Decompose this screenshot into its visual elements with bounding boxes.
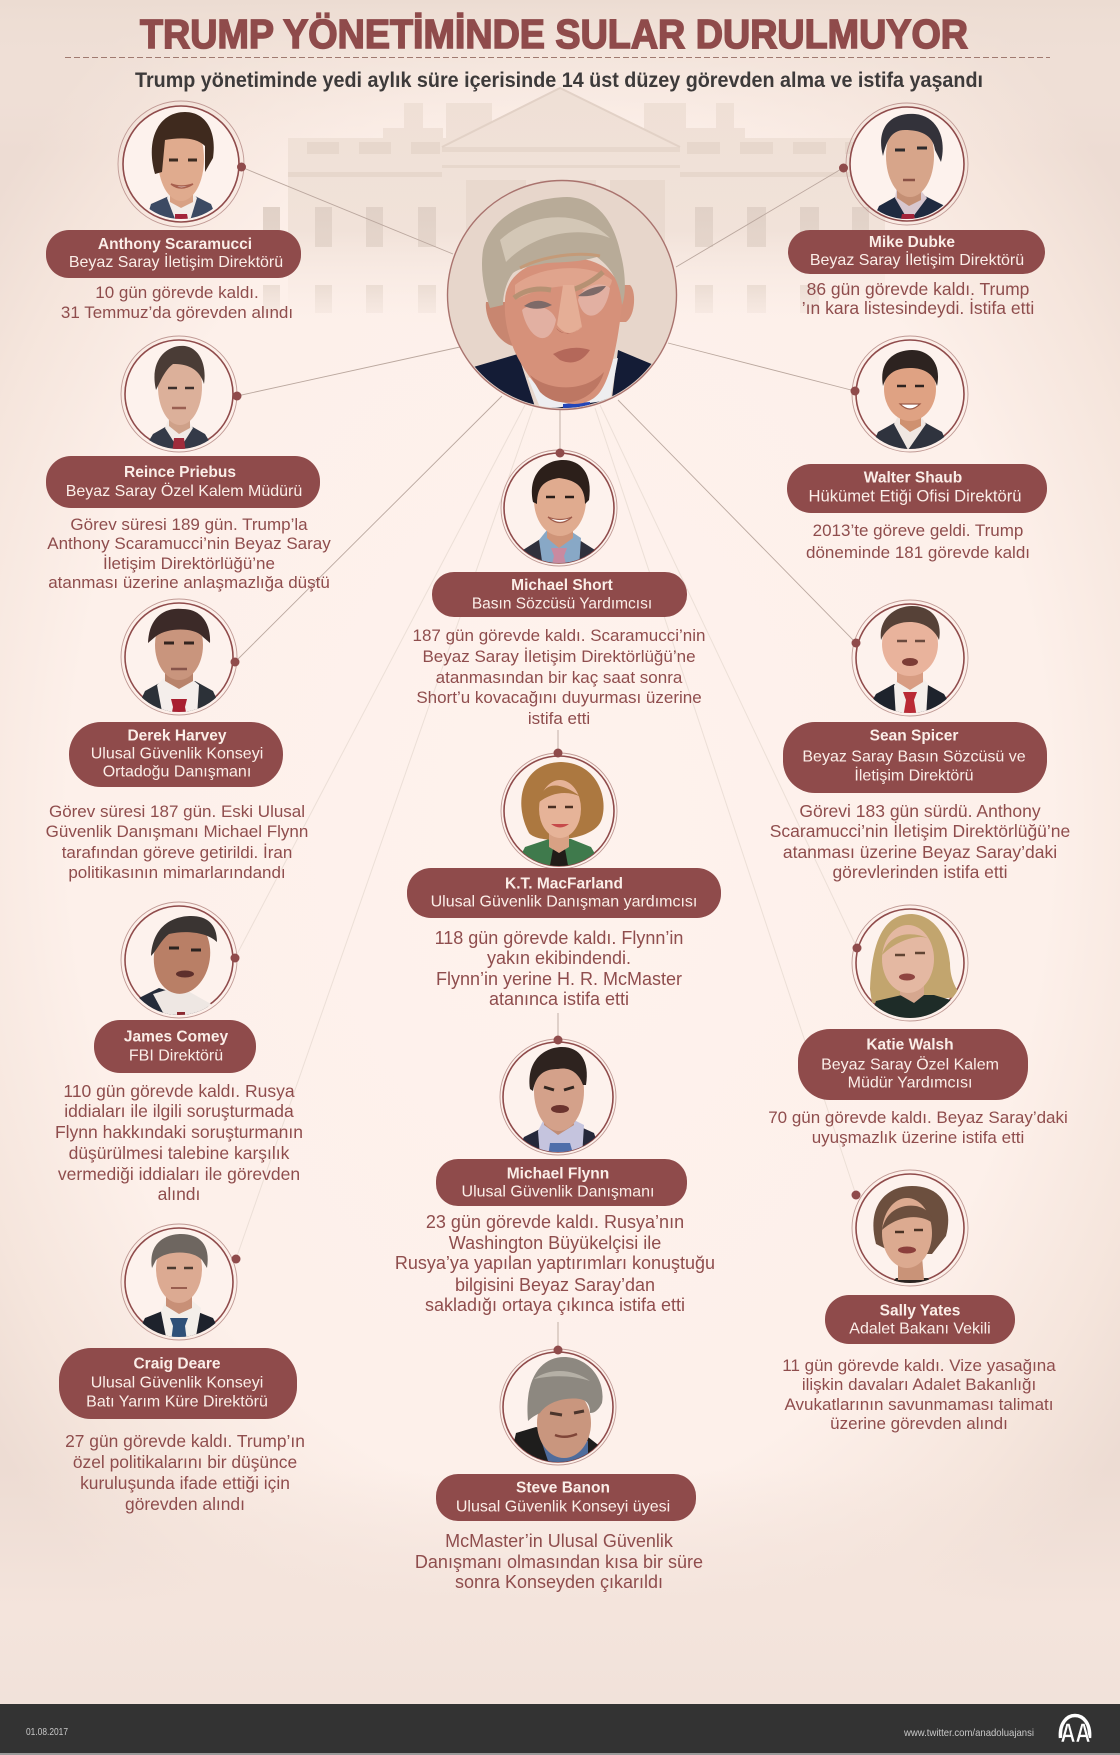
logo: AA: AA	[1060, 1718, 1090, 1748]
description: düşürülmesi talebine karşılık	[69, 1143, 290, 1163]
portrait	[118, 101, 246, 227]
description: döneminde 181 görevde kaldı	[806, 543, 1030, 562]
name pill: Reince Priebus	[124, 464, 236, 481]
person: Sally Yates	[782, 1170, 1056, 1433]
name pill: Michael Flynn	[507, 1166, 609, 1182]
description: iddiaları ile ilgili soruşturmada	[64, 1101, 294, 1121]
name pill: Katie Walsh	[866, 1036, 954, 1054]
name pill: FBI Direktörü	[129, 1048, 223, 1064]
description: 27 gün görevde kaldı. Trump’ın	[65, 1431, 305, 1451]
name pill: Müdür Yardımcısı	[848, 1074, 972, 1092]
name pill: Beyaz Saray İletişim Direktörü	[810, 250, 1024, 269]
portrait	[852, 1170, 968, 1288]
name pill: Beyaz Saray Özel Kalem Müdürü	[66, 482, 302, 500]
name pill: Walter Shaub	[864, 470, 962, 486]
name pill: Sally Yates	[880, 1302, 960, 1320]
name pill	[46, 456, 320, 508]
footer bar	[0, 1704, 1120, 1755]
portrait	[501, 448, 617, 568]
name pill: Batı Yarım Küre Direktörü	[86, 1394, 268, 1410]
name pill	[46, 230, 301, 278]
name pill	[59, 1348, 297, 1419]
person: James Comey	[55, 902, 303, 1204]
description: görevden alındı	[125, 1494, 245, 1514]
description: Flynn’in yerine H. R. McMaster	[436, 969, 682, 989]
portrait	[852, 600, 968, 718]
name pill: Anthony Scaramucci	[98, 236, 252, 253]
name pill: Basın Sözcüsü Yardımcısı	[472, 596, 652, 612]
description: 118 gün görevde kaldı. Flynn’in	[435, 928, 683, 948]
name pill: Ulusal Güvenlik Konseyi	[91, 1374, 263, 1392]
description: Görev süresi 189 gün. Trump’la	[70, 515, 308, 534]
connector lines	[235, 167, 857, 1350]
name pill: Beyaz Saray Basın Sözcüsü ve	[802, 748, 1026, 766]
portrait	[121, 902, 240, 1020]
description: Rusya’ya yapılan yaptırımları konuştuğu	[395, 1253, 715, 1273]
portrait	[500, 1036, 616, 1157]
description: alındı	[158, 1184, 200, 1204]
portrait	[839, 103, 968, 225]
description: Danışmanı olmasından kısa bir süre	[415, 1552, 703, 1572]
name pill	[783, 722, 1047, 793]
description: tarafından göreve getirildi. İran	[62, 843, 292, 862]
name pill: Ulusal Güvenlik Danışman yardımcısı	[431, 894, 697, 910]
person: Craig Deare	[59, 1224, 305, 1514]
name pill: Craig Deare	[133, 1356, 221, 1372]
description: üzerine görevden alındı	[830, 1414, 1008, 1433]
person: Anthony Scaramucci	[46, 101, 301, 322]
person: Reince Priebus	[46, 336, 331, 592]
description: atanması üzerine anlaşmazlığa düştü	[48, 573, 330, 592]
name pill: Beyaz Saray İletişim Direktörü	[69, 252, 283, 271]
description: görevlerinden istifa etti	[832, 862, 1008, 882]
portrait	[852, 905, 968, 1023]
description: vermediği iddiaları ile görevden	[58, 1164, 300, 1184]
portrait	[500, 1346, 616, 1467]
source url: www.twitter.com/anadoluajansi	[903, 1727, 1034, 1739]
portrait	[121, 599, 240, 717]
description: Görevi 183 gün sürdü. Anthony	[799, 801, 1041, 821]
name pill: İletişim Direktörü	[854, 766, 974, 784]
name pill: Adalet Bakanı Vekili	[849, 1320, 991, 1338]
description: Avukatlarının savunmaması talimatı	[785, 1395, 1053, 1414]
description: politikasının mimarlarındandı	[68, 863, 286, 882]
name pill: Ulusal Güvenlik Konseyi üyesi	[456, 1498, 670, 1516]
name pill: Hükümet Etiği Ofisi Direktörü	[808, 486, 1022, 506]
name pill: James Comey	[124, 1028, 229, 1046]
name pill: K.T. MacFarland	[505, 876, 623, 892]
name pill: Sean Spicer	[870, 728, 958, 744]
description: sakladığı ortaya çıkınca istifa etti	[425, 1295, 685, 1315]
description: Beyaz Saray İletişim Direktörlüğü’ne	[422, 647, 696, 666]
person: Michael Short	[413, 448, 705, 728]
description: Anthony Scaramucci’nin Beyaz Saray	[47, 534, 331, 553]
name pill: Steve Banon	[516, 1480, 610, 1496]
description: özel politikalarını bir düşünce	[73, 1452, 297, 1472]
description: 23 gün görevde kaldı. Rusya’nın	[426, 1212, 684, 1232]
name pill	[69, 722, 283, 787]
person: Sean Spicer	[770, 600, 1070, 882]
name pill: Ulusal Güvenlik Konseyi	[91, 746, 263, 762]
person: Derek Harvey	[46, 599, 308, 882]
description: 86 gün görevde kaldı. Trump	[807, 279, 1029, 299]
person: Mike Dubke	[788, 103, 1045, 318]
date: 01.08.2017	[26, 1727, 68, 1738]
description: Görev süresi 187 gün. Eski Ulusal	[49, 802, 305, 821]
description: ’ın kara listesindeydi. İstifa etti	[802, 298, 1034, 318]
portrait	[121, 1224, 240, 1342]
description: Scaramucci’nin İletişim Direktörlüğü’ne	[770, 821, 1070, 841]
description: 11 gün görevde kaldı. Vize yasağına	[782, 1356, 1056, 1375]
name pill	[432, 572, 687, 617]
description: 110 gün görevde kaldı. Rusya	[63, 1081, 295, 1101]
description: sonra Konseyden çıkarıldı	[455, 1572, 663, 1592]
description: 187 gün görevde kaldı. Scaramucci’nin	[413, 626, 705, 645]
person: Michael Flynn	[395, 1036, 715, 1315]
person: Katie Walsh	[768, 905, 1068, 1147]
description: Güvenlik Danışmanı Michael Flynn	[46, 822, 308, 841]
name pill: Ortadoğu Danışmanı	[103, 764, 251, 780]
central portrait: Donald Trump	[448, 180, 676, 420]
name pill: Michael Short	[511, 577, 613, 594]
name pill	[436, 1474, 696, 1521]
portrait	[121, 336, 242, 454]
name pill: Derek Harvey	[127, 728, 227, 744]
description: Washington Büyükelçisi ile	[449, 1233, 661, 1253]
description: kuruluşunda ifade ettiği için	[80, 1473, 290, 1493]
description: uyuşmazlık üzerine istifa etti	[812, 1128, 1024, 1147]
description: 2013’te göreve geldi. Trump	[813, 521, 1023, 540]
description: Flynn hakkındaki soruşturmanın	[55, 1122, 303, 1142]
name pill	[798, 1029, 1028, 1100]
description: atanınca istifa etti	[489, 989, 629, 1009]
description: McMaster’in Ulusal Güvenlik	[445, 1531, 674, 1551]
name pill	[94, 1020, 256, 1073]
name pill	[436, 1159, 687, 1206]
subtitle: Trump yönetiminde yedi aylık süre içerisinde 14 üst düzey görevden alma ve istifa yaşandı	[135, 69, 983, 92]
description: istifa etti	[528, 709, 590, 728]
name pill: Ulusal Güvenlik Danışmanı	[462, 1184, 654, 1200]
description: atanmasından bir kaç saat sonra	[436, 668, 683, 687]
name pill	[788, 230, 1045, 274]
description: atanması üzerine Beyaz Saray’daki	[783, 842, 1057, 862]
name pill	[787, 464, 1047, 513]
name pill: Beyaz Saray Özel Kalem	[821, 1056, 999, 1074]
portrait	[850, 336, 968, 454]
description: yakın ekibindendi.	[487, 948, 631, 968]
description: İletişim Direktörlüğü’ne	[103, 554, 275, 573]
person: Walter Shaub	[787, 336, 1047, 562]
portrait	[501, 748, 617, 871]
person: Steve Bannon	[415, 1346, 703, 1592]
name pill: Mike Dubke	[869, 234, 955, 251]
description: 10 gün görevde kaldı.	[95, 283, 259, 302]
person: K.T. MacFarland	[407, 748, 721, 1009]
description: bilgisini Beyaz Saray’dan	[455, 1275, 655, 1295]
name pill	[825, 1295, 1015, 1344]
description: 31 Temmuz’da görevden alındı	[61, 303, 293, 322]
White House backdrop	[263, 88, 885, 328]
description: 70 gün görevde kaldı. Beyaz Saray’daki	[768, 1108, 1068, 1127]
title: TRUMP YÖNETİMİNDE SULAR DURULMUYOR	[140, 11, 968, 57]
description: Short’u kovacağını duyurması üzerine	[416, 688, 702, 707]
description: ilişkin davaları Adalet Bakanlığı	[802, 1375, 1036, 1394]
name pill	[407, 868, 721, 918]
